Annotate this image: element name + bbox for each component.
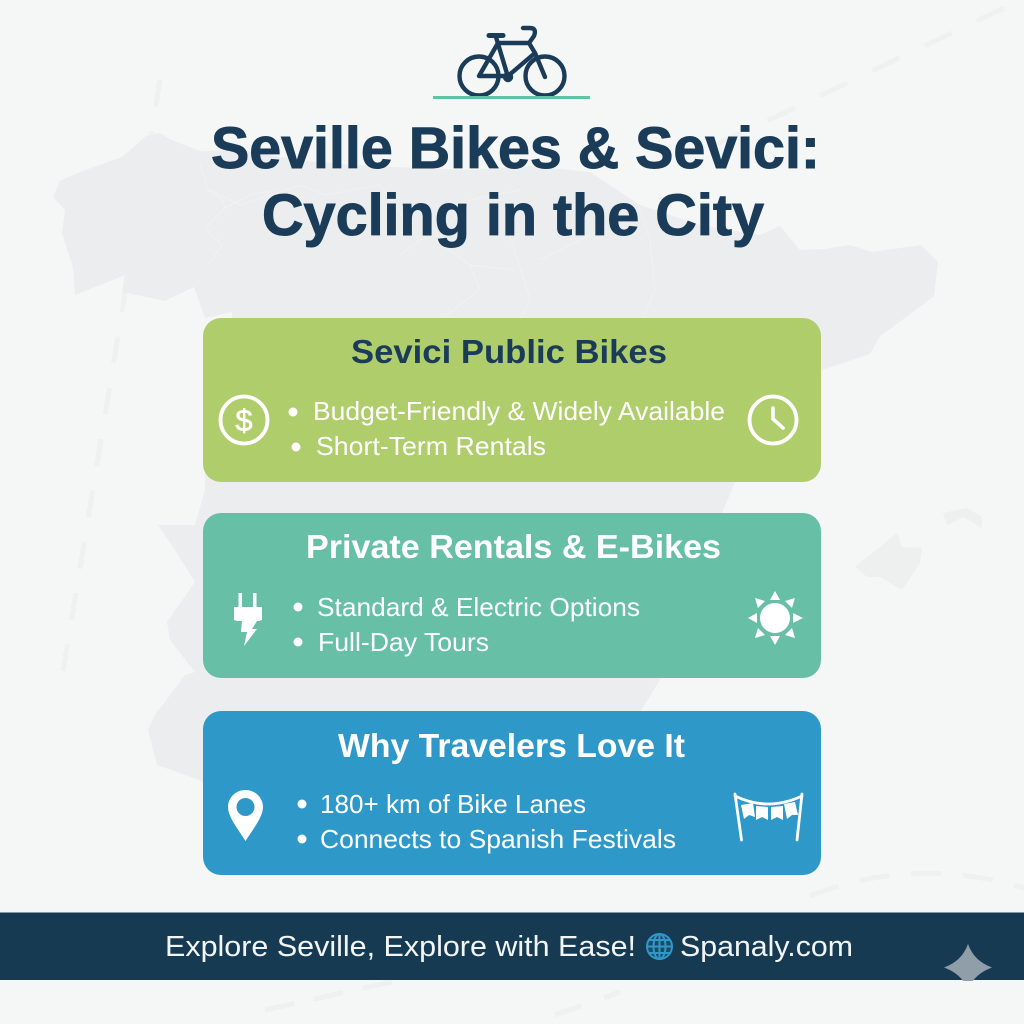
heading: Private Rentals and E-Bikes: Private Rentals & E-Bikes [306, 528, 721, 565]
title: Seville Bikes & Sevici: [211, 116, 820, 181]
bullet list: Sevici features: Short-Term Rentals [316, 431, 546, 461]
icon: map pin [228, 790, 263, 841]
footer tagline: Explore Seville, Explore with Ease! [165, 931, 636, 963]
bullet list: traveler reasons: Connects to Spanish Festivals [320, 824, 676, 854]
title: Cycling in the City [262, 183, 764, 248]
background map of Spain [53, 133, 982, 860]
footer website: Spanaly.com [680, 931, 853, 963]
title [211, 116, 820, 248]
panel: Private Rentals and E-Bikes [203, 513, 821, 678]
icon: globe [647, 934, 672, 959]
icon: electric plug [234, 593, 262, 646]
icon: bicycle [460, 28, 564, 96]
panel: Sevici Public Bikes [203, 318, 821, 482]
icon: dollar coin: $ [235, 403, 253, 438]
bullet list: Sevici features: Budget-Friendly & Widely Available [313, 396, 725, 426]
footer bar [0, 912, 1024, 980]
bullet list: Sevici features [288, 396, 725, 461]
icon: dollar coin [220, 396, 268, 444]
heading: Sevici Public Bikes: Sevici Public Bikes [351, 333, 667, 370]
icon: clock [750, 396, 796, 444]
icon: festival bunting [735, 794, 802, 840]
icon: sparkle [944, 944, 992, 981]
bullet list: rental features: Full-Day Tours [318, 627, 489, 657]
panel: Why Travelers Love It [203, 711, 821, 875]
bullet list: traveler reasons: 180+ km of Bike Lanes [320, 789, 586, 819]
bullet list: traveler reasons [298, 789, 676, 854]
title underline [433, 96, 590, 99]
bullet list: rental features [294, 592, 640, 657]
heading: Why Travelers Love It: Why Travelers Love It [338, 727, 685, 764]
bullet list: rental features: Standard & Electric Options [317, 592, 640, 622]
icon: sun [748, 591, 803, 645]
